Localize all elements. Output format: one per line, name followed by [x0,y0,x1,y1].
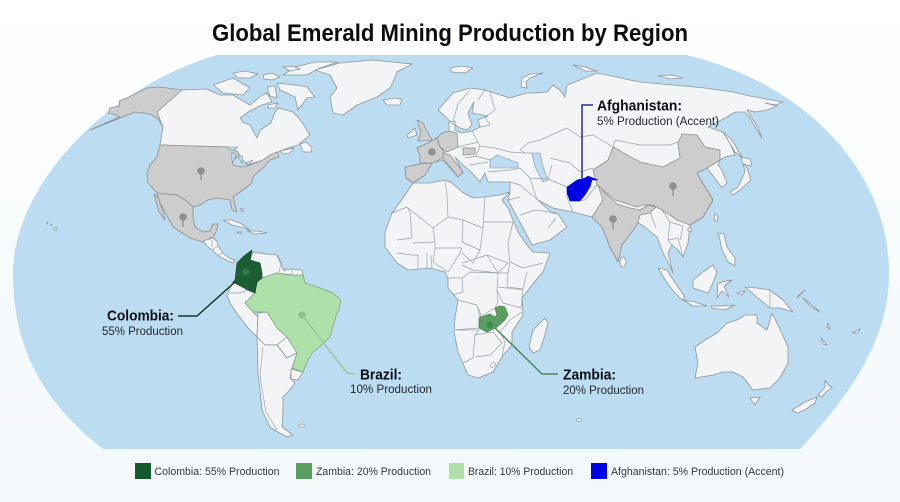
legend item: brazil: Brazil: 10% Production [468,466,573,478]
eurasia [405,65,793,312]
paraguay [277,337,297,358]
callout: zambia: 20% Production [563,385,644,397]
peru and ecuador [227,282,258,337]
pin: india [609,215,617,229]
central america [203,238,235,263]
southeast asian islands [658,265,793,312]
legend item: afghanistan: Afghanistan: 5% Production (Accent) [611,466,784,478]
pin: mexico [179,213,187,227]
callout: brazil: 10% Production [350,384,432,396]
callout: brazil [302,315,432,396]
new zealand [792,397,817,413]
legend item: zambia: Zambia: 20% Production [316,466,431,478]
north america [90,60,412,263]
legend item: colombia [135,463,280,479]
india [592,185,656,262]
colombia [233,250,262,293]
map pins [179,148,677,328]
oceania [47,222,860,422]
madagascar [529,318,548,353]
canada [157,89,310,165]
china [593,134,720,225]
uruguay [291,369,303,380]
great lakes [226,147,253,165]
pacific islands [797,290,860,345]
legend item: colombia: Colombia: 55% Production [154,466,280,478]
title: Global Emerald Mining Production by Region [212,20,688,47]
caribbean islands [223,220,267,234]
mexico [154,193,218,242]
legend item: brazil [449,463,573,479]
iceland [383,98,402,105]
zambia [479,306,508,332]
chile and argentina [257,337,297,437]
pin: france [428,148,436,156]
pin: colombia [242,268,250,276]
afghanistan [567,176,598,201]
world map [13,55,889,449]
legend [135,463,784,479]
brazil [245,273,341,372]
venezuela and guianas [250,252,304,279]
callout: colombia [102,282,235,338]
pin: zambia [486,322,494,328]
callout: afghanistan [582,98,719,178]
black sea [490,155,518,168]
legend item: zambia [296,463,431,479]
pin: china [669,182,677,196]
pin: brazil [298,311,306,319]
pin: usa [197,167,205,180]
african borders [392,181,543,363]
ocean [13,55,889,449]
usa [147,145,279,212]
uk, france, germany, iberia, italy and austria [405,120,475,183]
callout: afghanistan: 5% Production (Accent) [597,116,719,128]
arctic islands [213,62,338,154]
alaska [90,87,182,130]
africa [385,180,550,378]
south america [227,250,341,437]
asian islands [450,65,752,267]
callout: zambia [495,328,644,397]
inland seas [490,153,548,182]
callout: colombia: Colombia: [107,308,174,324]
greenland [315,60,412,115]
eurasian borders [453,90,683,257]
callout: colombia: 55% Production [102,326,183,338]
caspian [532,153,548,182]
australia [695,313,788,390]
tasmania [750,397,760,405]
callout: afghanistan: Afghanistan: [597,98,682,114]
legend item: afghanistan [591,463,784,479]
bolivia [257,312,287,345]
callout: zambia: Zambia: [563,366,616,384]
callout: brazil: Brazil: [360,366,402,384]
falkland islands [298,424,304,427]
